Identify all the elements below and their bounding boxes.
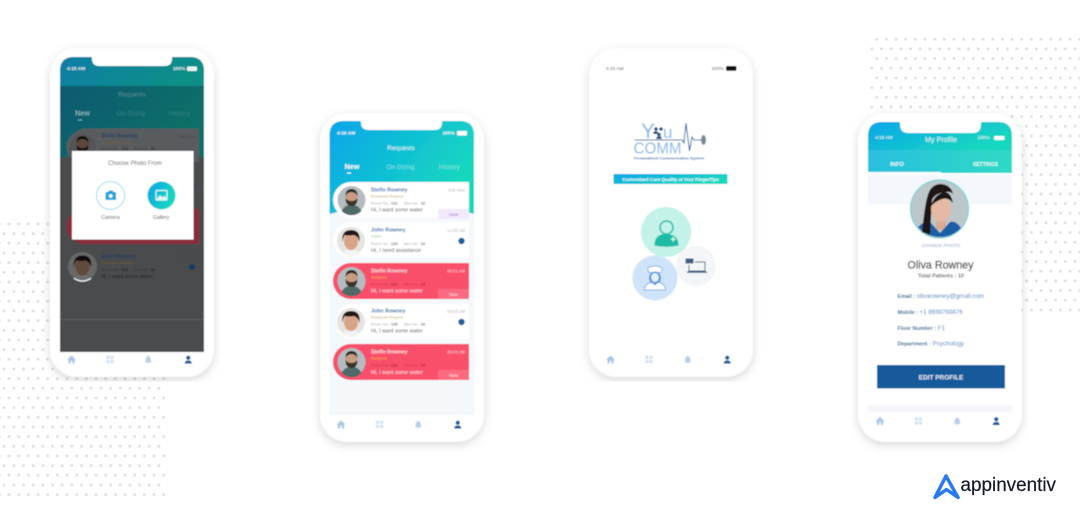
icon: people group	[653, 127, 663, 139]
dot pattern: bottom left	[0, 221, 166, 497]
list background	[330, 205, 474, 415]
bottom navigation	[67, 355, 192, 364]
brand logo: appinventiv: appinventiv	[960, 474, 1056, 496]
card: Stefin Rowney, assigned second: Bed No:	[404, 362, 418, 368]
card: Stefin Rowney, assigned second: 12	[421, 362, 426, 368]
dimmed card: red	[66, 209, 199, 244]
card: John Rowney, broadcast	[336, 304, 469, 340]
header title and tabs: History	[439, 164, 461, 171]
header title and tabs	[345, 145, 461, 174]
status bar: 100%	[712, 66, 725, 72]
logo: YouComm: Y	[641, 120, 655, 143]
status bar: 4:19 AM	[337, 130, 355, 136]
modal: choose photo: Camera	[101, 215, 120, 221]
header title and tabs: On Going	[386, 164, 415, 171]
profile name: Oliva Rowney	[908, 260, 974, 272]
phone body	[590, 48, 752, 376]
status bar: 100%	[442, 130, 456, 136]
modal: choose photo: Gallery	[153, 215, 170, 221]
edit profile button: EDIT PROFILE	[919, 374, 964, 382]
card: Stefin Rowney, new: Room No:	[371, 200, 389, 206]
card: John Rowney, admin: Admin	[371, 234, 382, 238]
change photo link: CHANGE PHOTO	[922, 243, 961, 249]
card: Stefin Rowney, new: New	[449, 212, 459, 217]
header title and tabs: Requests	[387, 145, 415, 152]
logo: YouComm	[634, 120, 706, 160]
status bar: 4:15 AM	[606, 66, 624, 72]
card: John Rowney, broadcast: 120	[391, 322, 398, 326]
card: John Rowney, broadcast: 09:03 AM	[447, 309, 466, 314]
tagline banner: Customized Care Quality at Your FingerTips	[622, 177, 719, 183]
dimmed card: Stefin Rowney: Room No:	[101, 146, 119, 151]
phone: my profile screen	[858, 114, 1022, 442]
status bar	[606, 66, 736, 72]
card: Stefin Rowney, assigned second: 121	[391, 362, 398, 368]
card: Stefin Rowney, assigned: 12	[421, 282, 426, 286]
card: Stefin Rowney, assigned: 09:01 AM	[447, 268, 466, 274]
card: Stefin Rowney, assigned second: Stefin Rowney	[371, 350, 408, 356]
status bar	[337, 130, 467, 136]
logo: YouComm: COMM	[634, 140, 682, 158]
card: Stefin Rowney, assigned second: Assigned	[371, 356, 387, 360]
modal: choose photo: Choose Photo From	[108, 161, 162, 167]
dot pattern: top right	[870, 37, 1080, 313]
card: Stefin Rowney, assigned: 121	[391, 282, 398, 286]
card: Stefin Rowney, new: Bed No:	[404, 200, 418, 206]
edit profile button	[877, 365, 1005, 388]
card: Stefin Rowney, new: 121	[391, 200, 398, 206]
card: John Rowney, admin: Bed No:	[404, 241, 418, 246]
card: John Rowney, admin: 12:00 AM	[447, 228, 466, 233]
bottom navigation	[606, 355, 731, 364]
dimmed card: Stefin Rowney: 121	[122, 146, 129, 151]
tabs: SETTINGS	[973, 162, 999, 168]
card: John Rowney, admin	[333, 222, 469, 258]
dimmed card: John Rowney: Broadcast Request	[101, 261, 134, 265]
bottom navigation	[876, 417, 1000, 425]
header title and tabs	[75, 92, 191, 120]
status bar and title: 100%	[978, 135, 991, 141]
card: John Rowney, broadcast: Hi, I want some water	[371, 328, 423, 334]
card: Stefin Rowney, assigned	[333, 263, 469, 299]
card: Stefin Rowney, assigned second	[333, 344, 469, 380]
dimmed card: John Rowney	[68, 252, 196, 282]
card: John Rowney, admin: 12	[421, 241, 426, 246]
card: John Rowney, broadcast: John Rowney	[371, 308, 405, 314]
card: John Rowney, broadcast: 10	[421, 322, 426, 326]
modal: choose photo	[72, 151, 194, 240]
card: John Rowney, broadcast: Room No:	[371, 322, 389, 326]
card: Stefin Rowney, new: Hi, I want some water	[371, 208, 423, 214]
total patients: Total Patients : 10	[918, 274, 964, 280]
icon: nurse circle	[632, 256, 678, 300]
tabs	[868, 162, 999, 174]
card: Stefin Rowney, new: Just Now	[448, 188, 466, 192]
card: John Rowney, broadcast: Bed No:	[404, 322, 418, 326]
dimmed card: John Rowney: 122	[122, 267, 129, 272]
card: John Rowney, admin: Room No:	[371, 241, 389, 246]
card: Stefin Rowney, assigned: Hi, I want some water	[371, 288, 423, 294]
dimmed card: Stefin Rowney: Broadcast Request	[101, 140, 134, 144]
tagline banner	[614, 174, 728, 184]
card: Stefin Rowney, assigned second: Hi, I want some water	[371, 370, 423, 376]
card: Stefin Rowney, new: Broadcast Request	[371, 194, 404, 198]
header title and tabs: New	[75, 108, 90, 118]
icon: device circle	[676, 246, 716, 286]
header title and tabs: On Going	[117, 110, 145, 118]
card: Stefin Rowney, assigned second: New	[449, 373, 459, 378]
phone body	[858, 114, 1022, 442]
card: Stefin Rowney, assigned second: Room No:	[371, 362, 389, 368]
header title and tabs: New	[345, 162, 360, 171]
card: John Rowney, admin: Hi, I need assistance	[371, 248, 421, 254]
status bar and title: My Profile	[925, 135, 957, 144]
icon: camera	[96, 182, 124, 210]
status bar: 4:15 AM	[67, 66, 85, 72]
dimmed card: Stefin Rowney: Stefin Rowney	[101, 134, 138, 140]
header title and tabs: History	[169, 110, 191, 118]
icon: doctor circle	[641, 207, 691, 257]
icon: stethoscope head	[701, 135, 706, 145]
card: John Rowney, admin: John Rowney	[371, 228, 405, 234]
gradient header	[330, 120, 474, 214]
dimmed screen	[60, 56, 204, 352]
header title and tabs: Requests	[118, 92, 146, 98]
footer band	[868, 405, 1012, 412]
status bar	[67, 66, 197, 72]
phone: requests list screen	[320, 114, 484, 442]
contact details: Email : olivarowney@gmail.com	[898, 293, 984, 300]
dimmed card: Stefin Rowney	[66, 128, 199, 163]
dimmed card: John Rowney: Bed No:	[134, 267, 148, 272]
status bar: 100%	[173, 66, 186, 72]
logo: YouComm: u	[663, 123, 672, 142]
phone: choose photo screen	[50, 48, 214, 376]
card: Stefin Rowney, assigned: Bed No:	[404, 282, 418, 286]
avatar: Oliva Rowney	[910, 180, 968, 238]
card: Stefin Rowney, new: 12	[421, 200, 426, 206]
dimmed card: John Rowney: 10:00 AM	[177, 254, 196, 259]
tabs: INFO	[890, 162, 904, 168]
phone: splash screen	[590, 48, 752, 376]
profile band	[868, 175, 1012, 204]
contact details: Floor Number : F1	[898, 325, 946, 332]
card: Stefin Rowney, assigned: Assigned	[371, 276, 387, 280]
card: Stefin Rowney, new: Stefin Rowney	[371, 188, 408, 194]
card: John Rowney, admin: 122	[391, 241, 398, 246]
dimmed badge	[189, 184, 195, 190]
bottom navigation	[336, 420, 461, 429]
dimmed card: Stefin Rowney: Bed No:	[134, 146, 148, 151]
card: Stefin Rowney, assigned: Stefin Rowney	[371, 268, 408, 274]
contact details: Department : Psychology	[898, 340, 965, 348]
contact details: Mobile : +1 8698769876	[898, 309, 963, 316]
status bar and title: 4:19 AM	[875, 135, 893, 141]
card: Stefin Rowney, assigned second: 09:03 AM	[447, 350, 466, 354]
status bar and title	[875, 135, 1004, 144]
icon: gallery	[148, 182, 176, 210]
dimmed card: John Rowney: John Rowney	[101, 254, 135, 260]
card: Stefin Rowney, new	[333, 182, 469, 219]
dimmed card: Stefin Rowney: Just Now	[178, 134, 196, 139]
phone body	[320, 114, 484, 442]
contact details	[898, 293, 984, 348]
card: Stefin Rowney, assigned: New	[449, 292, 459, 297]
logo: YouComm: Personalized Communication System	[634, 156, 705, 160]
dimmed card: John Rowney: Room No:	[101, 267, 119, 272]
phone body	[50, 48, 214, 376]
dimmed card: John Rowney: Hi, I want some water	[101, 274, 153, 280]
dimmed card: Stefin Rowney: 12	[151, 146, 156, 151]
dimmed card: John Rowney: 12	[151, 267, 156, 272]
gradient header	[868, 121, 1012, 173]
card: John Rowney, broadcast: Broadcast Request	[371, 316, 404, 320]
card: Stefin Rowney, assigned: Room No:	[371, 282, 389, 286]
icon: appinventiv mark	[935, 476, 958, 498]
